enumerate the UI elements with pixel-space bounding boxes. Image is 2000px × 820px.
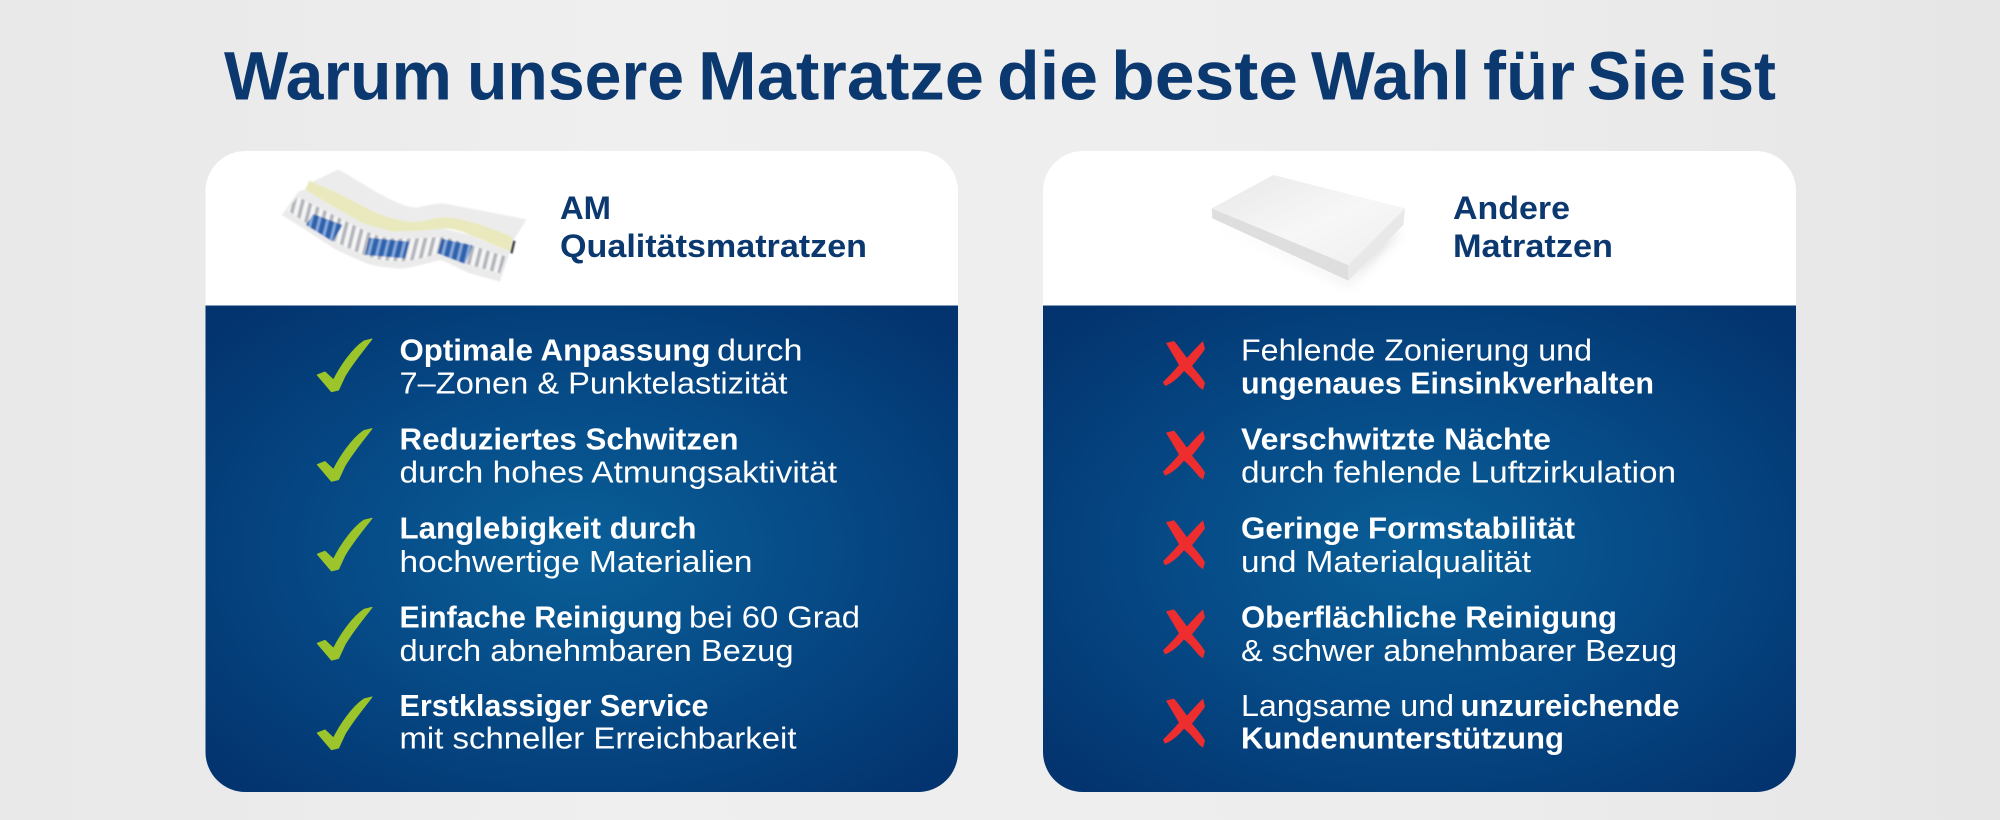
icon: red cross <box>1163 341 1205 390</box>
heading: Andere Matratzen <box>1453 190 1613 264</box>
title: Sie <box>1587 38 1686 114</box>
benefit 2: Reduziertes Schwitzen <box>317 422 837 490</box>
drawback 3: Geringe Formstabilität <box>1163 510 1575 579</box>
benefit 1: Optimale Anpassung: Optimale Anpassung <box>400 332 710 368</box>
icon: green check <box>317 697 372 750</box>
heading: AM Qualitätsmatratzen: AM <box>560 190 611 226</box>
benefit 1: Optimale Anpassung: durch <box>717 332 802 368</box>
drawback 5: Kundenunterstützung <box>1163 688 1680 756</box>
drawback 3: Geringe Formstabilität: und Materialqualität <box>1241 544 1531 579</box>
benefit 4: Einfache Reinigung: durch abnehmbaren Bezug <box>400 633 794 668</box>
icon: red cross <box>1163 609 1205 658</box>
icon: green check <box>317 339 372 392</box>
panel header: white <box>1043 151 1796 306</box>
benefit 1: Optimale Anpassung <box>317 332 802 400</box>
drawback 1: Fehlende Zonierung <box>1163 332 1654 400</box>
drawback 4: Oberflächliche Reinigung <box>1163 600 1677 668</box>
panel header: white <box>206 151 958 306</box>
heading: AM Qualitätsmatratzen <box>560 190 867 264</box>
icon: green check <box>317 429 372 481</box>
benefit 2: Reduziertes Schwitzen: durch hohes Atmungsaktivität <box>400 454 837 490</box>
drawback 2: Verschwitzte Nächte: durch fehlende Luftzirkulation <box>1241 454 1676 490</box>
drawback 3: Geringe Formstabilität: Geringe Formstabilität <box>1241 510 1575 546</box>
panel: AM Qualitätsmatratzen <box>206 151 958 792</box>
benefit 3: Langlebigkeit: Langlebigkeit durch <box>400 510 696 546</box>
title: Wahl <box>1311 38 1470 114</box>
title: beste <box>1111 38 1298 114</box>
panel: Andere Matratzen <box>1043 151 1796 792</box>
benefit 3: Langlebigkeit: hochwertige Materialien <box>400 544 752 579</box>
title <box>224 38 1776 114</box>
drawback 4: Oberflächliche Reinigung: & schwer abnehmbarer Bezug <box>1241 633 1677 668</box>
panel body: blue <box>206 306 958 792</box>
benefit 3: Langlebigkeit <box>317 510 752 579</box>
heading: Andere Matratzen: Matratzen <box>1453 228 1613 264</box>
title: Matratze <box>698 38 984 114</box>
title: Warum <box>224 38 452 114</box>
benefit 5: Erstklassiger Service <box>317 688 797 756</box>
benefit 1: Optimale Anpassung: 7–Zonen & Punktelastizität <box>400 366 788 400</box>
icon: green check <box>317 518 372 571</box>
title: für <box>1483 38 1575 114</box>
drawback 1: Fehlende Zonierung: ungenaues Einsinkverhalten <box>1241 366 1654 400</box>
drawback 5: Kundenunterstützung: Langsame und <box>1241 688 1454 723</box>
benefit 2: Reduziertes Schwitzen: Reduziertes Schwitzen <box>400 422 738 456</box>
drawback 5: Kundenunterstützung: unzureichende <box>1460 688 1680 723</box>
icon: red cross <box>1163 699 1205 748</box>
image: pocket spring mattress <box>282 169 527 282</box>
heading: Andere Matratzen: Andere <box>1453 190 1570 226</box>
image: plain foam mattress <box>1212 175 1405 283</box>
title: unsere <box>467 38 684 114</box>
benefit 4: Einfache Reinigung: bei 60 Grad <box>689 600 860 634</box>
drawback 5: Kundenunterstützung: Kundenunterstützung <box>1241 720 1564 756</box>
title: ist <box>1699 38 1776 114</box>
benefit 5: Erstklassiger Service: mit schneller Erreichbarkeit <box>400 720 797 756</box>
panel body: blue <box>1043 306 1796 792</box>
benefit 4: Einfache Reinigung: Einfache Reinigung <box>400 600 682 634</box>
benefit 4: Einfache Reinigung <box>317 600 860 668</box>
drawback 4: Oberflächliche Reinigung: Oberflächliche Reinigung <box>1241 600 1617 634</box>
icon: red cross <box>1163 431 1205 480</box>
heading: AM Qualitätsmatratzen: Qualitätsmatratzen <box>560 228 867 264</box>
drawback 1: Fehlende Zonierung: Fehlende Zonierung und <box>1241 332 1592 368</box>
title: die <box>997 38 1098 114</box>
drawback 2: Verschwitzte Nächte: Verschwitzte Nächte <box>1241 422 1551 456</box>
benefit 5: Erstklassiger Service: Erstklassiger Service <box>400 688 708 723</box>
icon: red cross <box>1163 520 1205 569</box>
icon: green check <box>317 607 372 660</box>
drawback 2: Verschwitzte Nächte <box>1163 422 1676 490</box>
